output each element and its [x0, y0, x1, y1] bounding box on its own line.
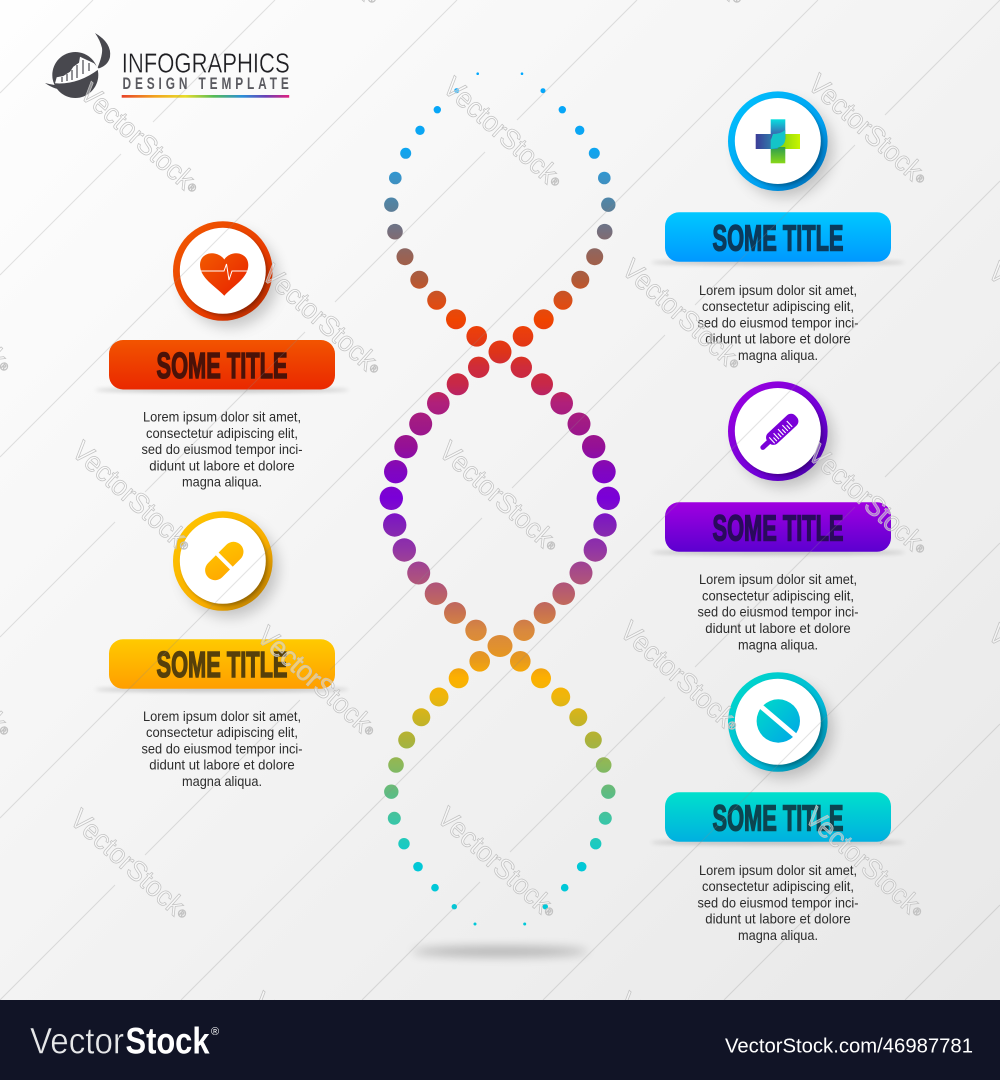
- logo rainbow underline: [122, 95, 289, 98]
- watermarks: ®: [913, 172, 926, 186]
- text block: yellow item: didunt ut labore et dolore: [149, 758, 295, 773]
- text block: blue item: sed do eiusmod tempor inci-: [698, 315, 858, 330]
- pill heading: yellow: SOME TITLE: [156, 644, 288, 685]
- watermarks: VectorStock: [799, 801, 931, 924]
- text block: yellow item: magna aliqua.: [182, 774, 262, 789]
- watermarks: VectorStock: [437, 71, 569, 194]
- text block: red item: [142, 410, 302, 490]
- watermarks: VectorStock: [251, 620, 383, 743]
- panel: pill item: [95, 511, 349, 789]
- text block: teal item: didunt ut labore et dolore: [705, 912, 851, 927]
- watermarks: ®: [185, 181, 198, 195]
- panel: thermometer item: [651, 381, 905, 652]
- text block: purple item: didunt ut labore et dolore: [705, 621, 851, 636]
- watermarks: ®: [175, 907, 188, 921]
- icon: heart with pulse: [200, 253, 248, 296]
- footer logo: Stock: [126, 1020, 210, 1062]
- badge: tablet: [728, 672, 833, 778]
- text block: red item: magna aliqua.: [182, 475, 262, 490]
- chart: DNA double helix of dots: [380, 72, 620, 925]
- text block: teal item: Lorem ipsum dolor sit amet,: [699, 863, 857, 878]
- badge: capsule: [173, 511, 278, 617]
- watermarks: VectorStock: [616, 253, 748, 376]
- pill heading: red: SOME TITLE: [156, 345, 288, 386]
- badge: heart: [173, 221, 278, 327]
- watermarks: ®: [548, 175, 561, 189]
- logo title: INFOGRAPHICS: [122, 48, 290, 79]
- icon: medical cross: [756, 119, 800, 163]
- text block: red item: sed do eiusmod tempor inci-: [142, 442, 302, 457]
- text block: teal item: magna aliqua.: [738, 928, 818, 943]
- text block: red item: didunt ut labore et dolore: [149, 458, 295, 473]
- watermarks: VectorStock: [74, 77, 206, 200]
- icon: capsule: [200, 536, 249, 586]
- text block: teal item: consectetur adipiscing elit,: [702, 879, 854, 894]
- text block: purple item: [698, 572, 858, 652]
- text block: red item: consectetur adipiscing elit,: [146, 426, 298, 441]
- pill heading: teal: [651, 792, 905, 845]
- logo: [45, 33, 293, 98]
- panel: heart item: [95, 221, 349, 490]
- text block: yellow item: [142, 709, 302, 789]
- text block: purple item: sed do eiusmod tempor inci-: [698, 605, 858, 620]
- footer logo: Vector: [30, 1020, 124, 1062]
- text block: blue item: consectetur adipiscing elit,: [702, 299, 854, 314]
- right strand: [510, 72, 620, 925]
- icon: scored tablet: [757, 699, 800, 743]
- panel: tablet item: [651, 672, 905, 943]
- watermarks: ®: [913, 542, 926, 556]
- text block: blue item: Lorem ipsum dolor sit amet,: [699, 283, 857, 298]
- text block: teal item: sed do eiusmod tempor inci-: [698, 895, 858, 910]
- watermarks: VectorStock: [66, 435, 198, 558]
- watermarks: ®: [725, 719, 738, 733]
- pill heading: red: [95, 340, 349, 392]
- watermarks: ®: [910, 905, 923, 919]
- watermarks: VectorStock: [614, 615, 746, 738]
- watermarks: VectorStock: [64, 803, 196, 926]
- text block: yellow item: Lorem ipsum dolor sit amet,: [143, 709, 301, 724]
- crossing dots: [488, 340, 512, 657]
- text block: blue item: didunt ut labore et dolore: [705, 332, 851, 347]
- text block: blue item: magna aliqua.: [738, 348, 818, 363]
- footer logo: [30, 1020, 219, 1062]
- badge: thermometer: [728, 381, 833, 487]
- text block: blue item: [698, 283, 858, 363]
- watermarks: ®: [544, 539, 557, 553]
- icon: thermometer: [756, 411, 801, 454]
- logo emblem: [45, 33, 110, 98]
- watermarks: ®: [362, 724, 375, 738]
- text block: purple item: consectetur adipiscing elit,: [702, 588, 854, 603]
- pill heading: blue: [651, 212, 905, 265]
- watermarks: VectorStock: [433, 435, 565, 558]
- footer logo: ®: [211, 1026, 219, 1038]
- text block: purple item: Lorem ipsum dolor sit amet,: [699, 572, 857, 587]
- text block: yellow item: sed do eiusmod tempor inci-: [142, 741, 302, 756]
- watermarks: VectorStock: [802, 68, 934, 191]
- text block: yellow item: consectetur adipiscing elit,: [146, 725, 298, 740]
- pill heading: purple: SOME TITLE: [712, 508, 844, 548]
- badge: medical cross: [728, 91, 833, 197]
- watermarks: VectorStock: [431, 801, 563, 924]
- ground shadow under DNA: [412, 946, 588, 956]
- pill heading: teal: SOME TITLE: [712, 798, 844, 838]
- footer bar: [0, 1000, 1000, 1080]
- text block: red item: Lorem ipsum dolor sit amet,: [143, 410, 301, 424]
- logo subtitle: DESIGN TEMPLATE: [122, 75, 293, 94]
- watermarks: ®: [542, 905, 555, 919]
- watermarks: ®: [177, 539, 190, 553]
- text block: teal item: [698, 863, 858, 943]
- text block: purple item: magna aliqua.: [738, 637, 818, 652]
- watermarks: ®: [367, 362, 380, 376]
- watermarks: VectorStock: [802, 438, 934, 561]
- watermarks: ®: [727, 357, 740, 371]
- panel: plus item: [651, 91, 905, 363]
- pill heading: yellow: [95, 639, 349, 692]
- pill heading: purple: [651, 502, 905, 555]
- watermarks: VectorStock: [256, 258, 388, 381]
- footer url: VectorStock.com/46987781: [725, 1036, 973, 1058]
- pill heading: blue: SOME TITLE: [712, 218, 844, 258]
- left strand: [380, 72, 490, 925]
